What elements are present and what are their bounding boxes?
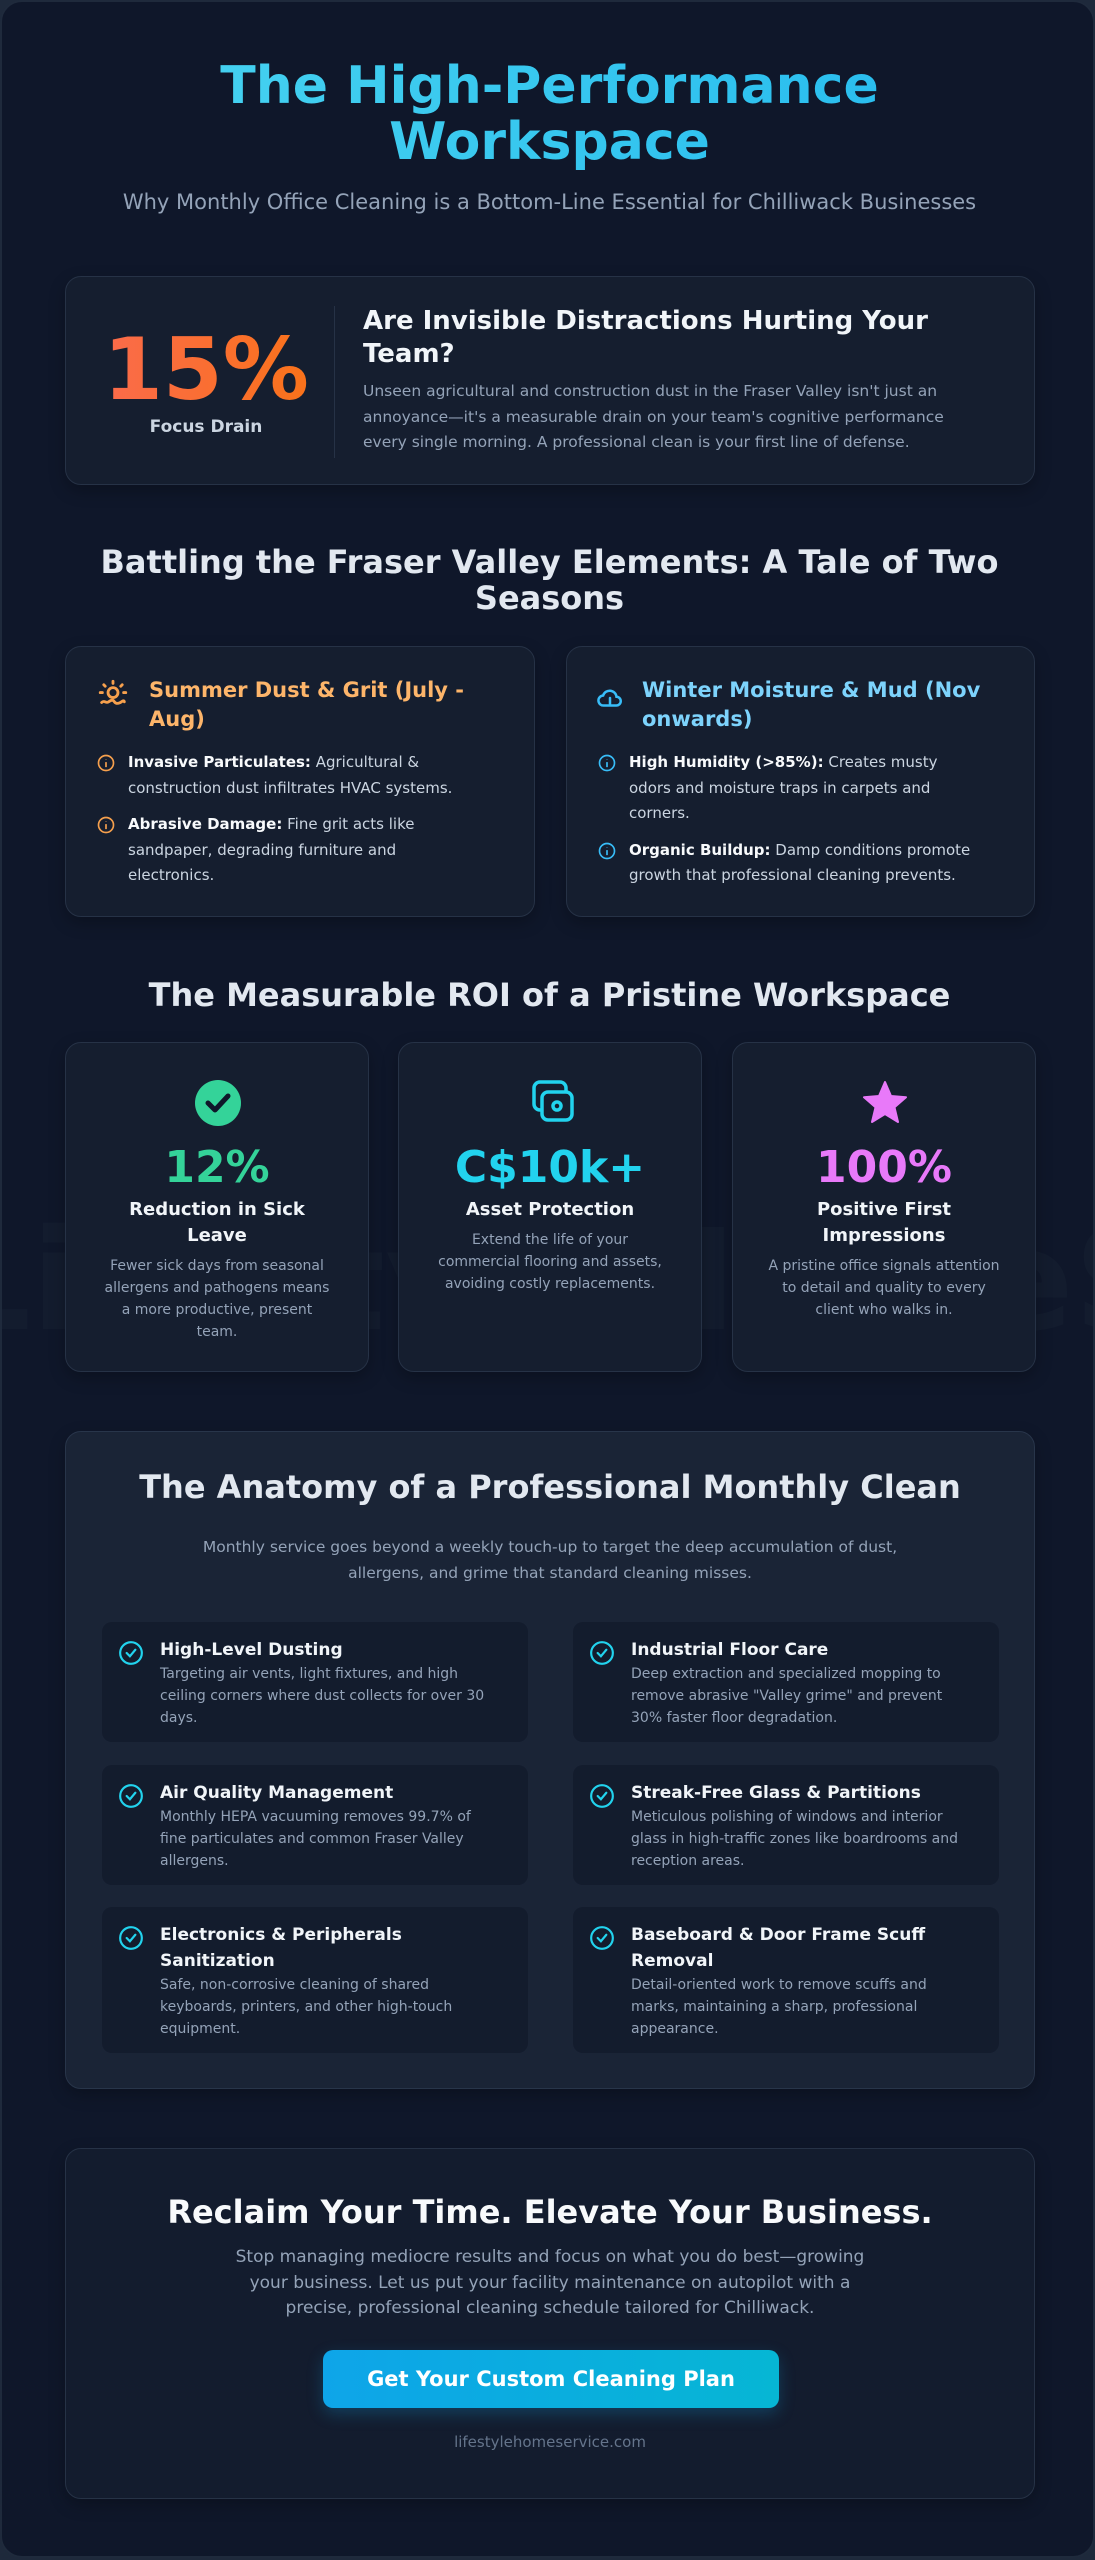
title: Workspace	[389, 112, 710, 172]
roi card: sick leave: 12%	[164, 1142, 270, 1193]
subtitle: Why Monthly Office Cleaning is a Bottom-Line Essential for Chilliwack Businesses	[123, 190, 976, 214]
button: Get Your Custom Cleaning Plan	[367, 2367, 735, 2391]
bullets	[598, 753, 970, 884]
roi card: sick leave	[65, 1042, 369, 1372]
item: glass: Streak-Free Glass & Partitions	[631, 1783, 921, 1803]
heading: seasons: Battling the Fraser Valley Elements: A Tale of Two Seasons	[101, 543, 998, 617]
stat: 15%: Focus Drain	[150, 417, 262, 437]
title: The High-Performance	[220, 56, 879, 116]
roi card: sick leave: Fewer sick days from seasonal allergens and pathogens means a more productive, present team.	[105, 1258, 329, 1340]
cta text: Stop managing mediocre results and focus on what you do best—growing your business. Let us put your facility maintenance on autopilot with a precise, professional cleaning schedule tailored for Chilliwack.	[236, 2247, 864, 2318]
icon: star	[862, 1081, 907, 1123]
item: baseboard: Detail-oriented work to remove scuffs and marks, maintaining a sharp, professional appearance.	[631, 1977, 927, 2037]
panel: call to action	[65, 2148, 1035, 2499]
item: floor: Deep extraction and specialized mopping to remove abrasive "Valley grime" and prevent 30% faster floor degradation.	[631, 1666, 942, 1726]
roi card: asset protection	[398, 1042, 702, 1372]
hero card: focus drain	[65, 276, 1035, 485]
roi card: asset protection: C$10k+	[455, 1142, 645, 1193]
item: baseboard	[573, 1907, 999, 2053]
item: baseboard: Baseboard & Door Frame Scuff Removal	[631, 1925, 925, 1971]
icon: cloud	[597, 690, 622, 707]
item: dusting: Targeting air vents, light fixtures, and high ceiling corners where dust collects for over 30 days.	[160, 1666, 484, 1726]
bullets: Abrasive Damage: Fine grit acts like sandpaper, degrading furniture and electronics.	[128, 815, 414, 884]
item: air quality: Monthly HEPA vacuuming removes 99.7% of fine particulates and common Fraser Valley allergens.	[160, 1809, 471, 1869]
roi card: asset protection: Extend the life of your commercial flooring and assets, avoiding costly replacements.	[438, 1232, 662, 1292]
button	[323, 2350, 779, 2408]
stat: 15%: 15%	[103, 320, 309, 420]
roi card: first impressions: A pristine office signals attention to detail and quality to every client who walks in.	[768, 1258, 1000, 1318]
title: Summer Dust & Grit (July - Aug)	[149, 678, 464, 731]
item: electronics: Electronics & Peripherals Sanitization	[160, 1925, 402, 1971]
bullets: Organic Buildup: Damp conditions promote growth that professional cleaning prevents.	[629, 840, 970, 884]
hero text	[363, 306, 944, 451]
title	[220, 56, 879, 172]
item: air quality: Air Quality Management	[160, 1783, 393, 1803]
item: dusting: High-Level Dusting	[160, 1640, 343, 1660]
cta heading: Reclaim Your Time. Elevate Your Business.	[167, 2193, 933, 2231]
heading: The Anatomy of a Professional Monthly Clean	[139, 1468, 961, 1506]
hero text: Are Invisible Distractions Hurting Your Team?	[363, 306, 928, 369]
roi card: first impressions: 100%	[816, 1142, 952, 1193]
icon: money	[532, 1080, 574, 1122]
item: dusting	[102, 1622, 528, 1742]
item: air quality	[102, 1765, 528, 1885]
panel: winter	[566, 646, 1035, 917]
roi card: first impressions: Positive First Impressions	[817, 1199, 951, 1246]
bullets: Invasive Particulates: Agricultural & construction dust infiltrates HVAC systems.	[128, 753, 452, 796]
item: glass: Meticulous polishing of windows and interior glass in high-traffic zones like boardrooms and reception areas.	[631, 1809, 958, 1869]
icon: check	[195, 1080, 241, 1126]
heading: ROI: The Measurable ROI of a Pristine Workspace	[149, 976, 950, 1014]
item: floor	[573, 1622, 999, 1742]
bullets: High Humidity (>85%): Creates musty odors and moisture traps in carpets and corners.	[629, 753, 937, 822]
item: glass	[573, 1765, 999, 1885]
item: floor: Industrial Floor Care	[631, 1640, 828, 1660]
item: electronics: Safe, non-corrosive cleaning of shared keyboards, printers, and other high-touch equipment.	[160, 1977, 452, 2037]
roi card: asset protection: Asset Protection	[466, 1199, 634, 1220]
bullets	[98, 753, 452, 884]
title: Winter Moisture & Mud (Nov onwards)	[642, 678, 980, 731]
panel: summer	[65, 646, 535, 917]
roi card: sick leave: Reduction in Sick Leave	[129, 1199, 305, 1246]
panel: anatomy	[65, 1431, 1035, 2089]
icon: sun	[98, 680, 128, 705]
roi card: first impressions	[732, 1042, 1036, 1372]
description: Monthly service goes beyond a weekly touch-up to target the deep accumulation of dust, allergens, and grime that standard cleaning misses.	[203, 1538, 897, 1582]
item: electronics	[102, 1907, 528, 2053]
hero text: Unseen agricultural and construction dust in the Fraser Valley isn't just an annoyance—it's a measurable drain on your team's cognitive performance every single morning. A professional clean is your first line of defense.	[363, 382, 944, 451]
footer link: lifestylehomeservice.com	[454, 2433, 646, 2451]
